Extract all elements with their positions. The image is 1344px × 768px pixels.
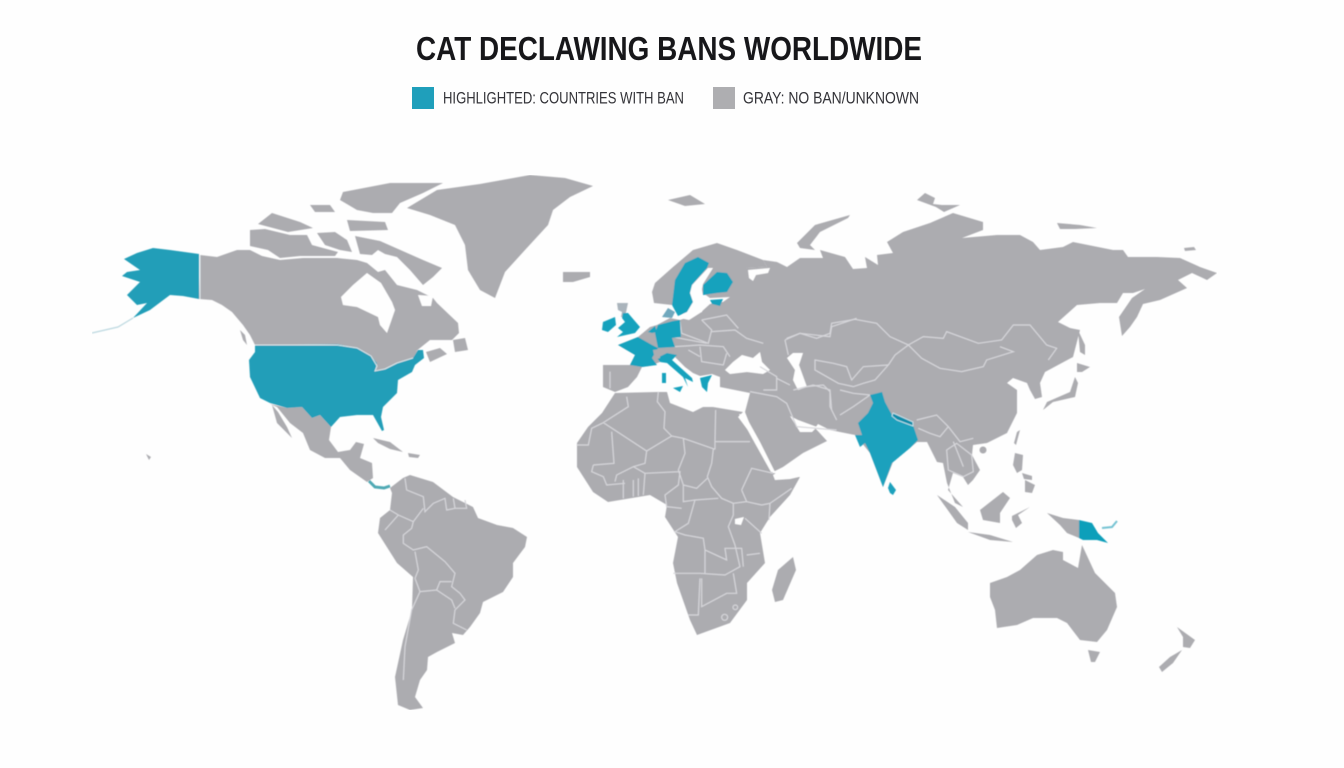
title: CAT DECLAWING BANS WORLDWIDE: [416, 31, 922, 68]
Caspian Sea: [787, 353, 807, 390]
Scotland: [617, 303, 628, 317]
Asia and Europe borders: [610, 315, 1057, 477]
world map: [92, 175, 1217, 710]
legend: [412, 87, 919, 109]
Greece: [700, 375, 712, 392]
Sardinia: [662, 373, 666, 383]
New Britain: ban: [1102, 521, 1117, 528]
Black Sea: [725, 352, 770, 374]
Arctic Eurasia islands: [668, 193, 1196, 251]
Iceland: [563, 272, 590, 282]
legend label: highlighted: HIGHLIGHTED: COUNTRIES WITH BAN: [443, 90, 684, 108]
legend swatch: highlighted: [412, 87, 434, 109]
New Zealand: [1159, 627, 1195, 672]
Estonia: [710, 299, 723, 306]
Italy: [657, 353, 693, 387]
Lake Victoria: [735, 517, 744, 525]
India and Sri Lanka: ban: [855, 392, 918, 495]
Persian Gulf: [790, 416, 817, 432]
legend label: gray: GRAY: NO BAN/UNKNOWN: [743, 90, 919, 108]
US-Canada border and Great Lakes shoreline: [200, 255, 413, 371]
Ungava Bay: [418, 295, 433, 306]
White Sea: [748, 268, 770, 281]
Hudson Bay: [341, 273, 395, 333]
France: [618, 337, 658, 367]
South America borders: [385, 478, 467, 680]
Ireland: [602, 317, 616, 332]
Africa: [577, 392, 800, 635]
Australia: [990, 545, 1117, 642]
USA and Alaska: ban (highlighted): [122, 248, 424, 431]
Red Sea: [739, 414, 775, 472]
legend swatch: gray: [713, 87, 735, 109]
North America: no-ban landmasses: [146, 175, 593, 482]
Africa borders: [577, 392, 792, 620]
Madagascar: [772, 557, 796, 602]
United Kingdom: [617, 313, 640, 337]
Germany: [655, 320, 681, 348]
Scandinavia and Kola: [652, 243, 767, 305]
Sicily: [673, 386, 683, 392]
Baltic Sea: [680, 268, 713, 320]
Netherlands: [648, 326, 657, 333]
Nepal: [892, 413, 913, 426]
Europe: ban countries (highlighted): [602, 257, 733, 392]
Papua New Guinea: ban: [1079, 520, 1108, 543]
Denmark: [662, 308, 675, 318]
Gulf of Aden: [773, 469, 803, 480]
Tasmania: [1088, 650, 1100, 662]
East and Southeast Asia islands: [937, 330, 1090, 542]
South America: [378, 475, 527, 710]
Costa Rica and Panama: ban: [369, 481, 390, 488]
Aleutian islands: [92, 318, 133, 333]
Eurasia: [603, 213, 1217, 507]
Sweden: [672, 257, 709, 316]
Finland: [703, 272, 733, 295]
Alpine and Benelux gray gaps: [645, 334, 660, 360]
